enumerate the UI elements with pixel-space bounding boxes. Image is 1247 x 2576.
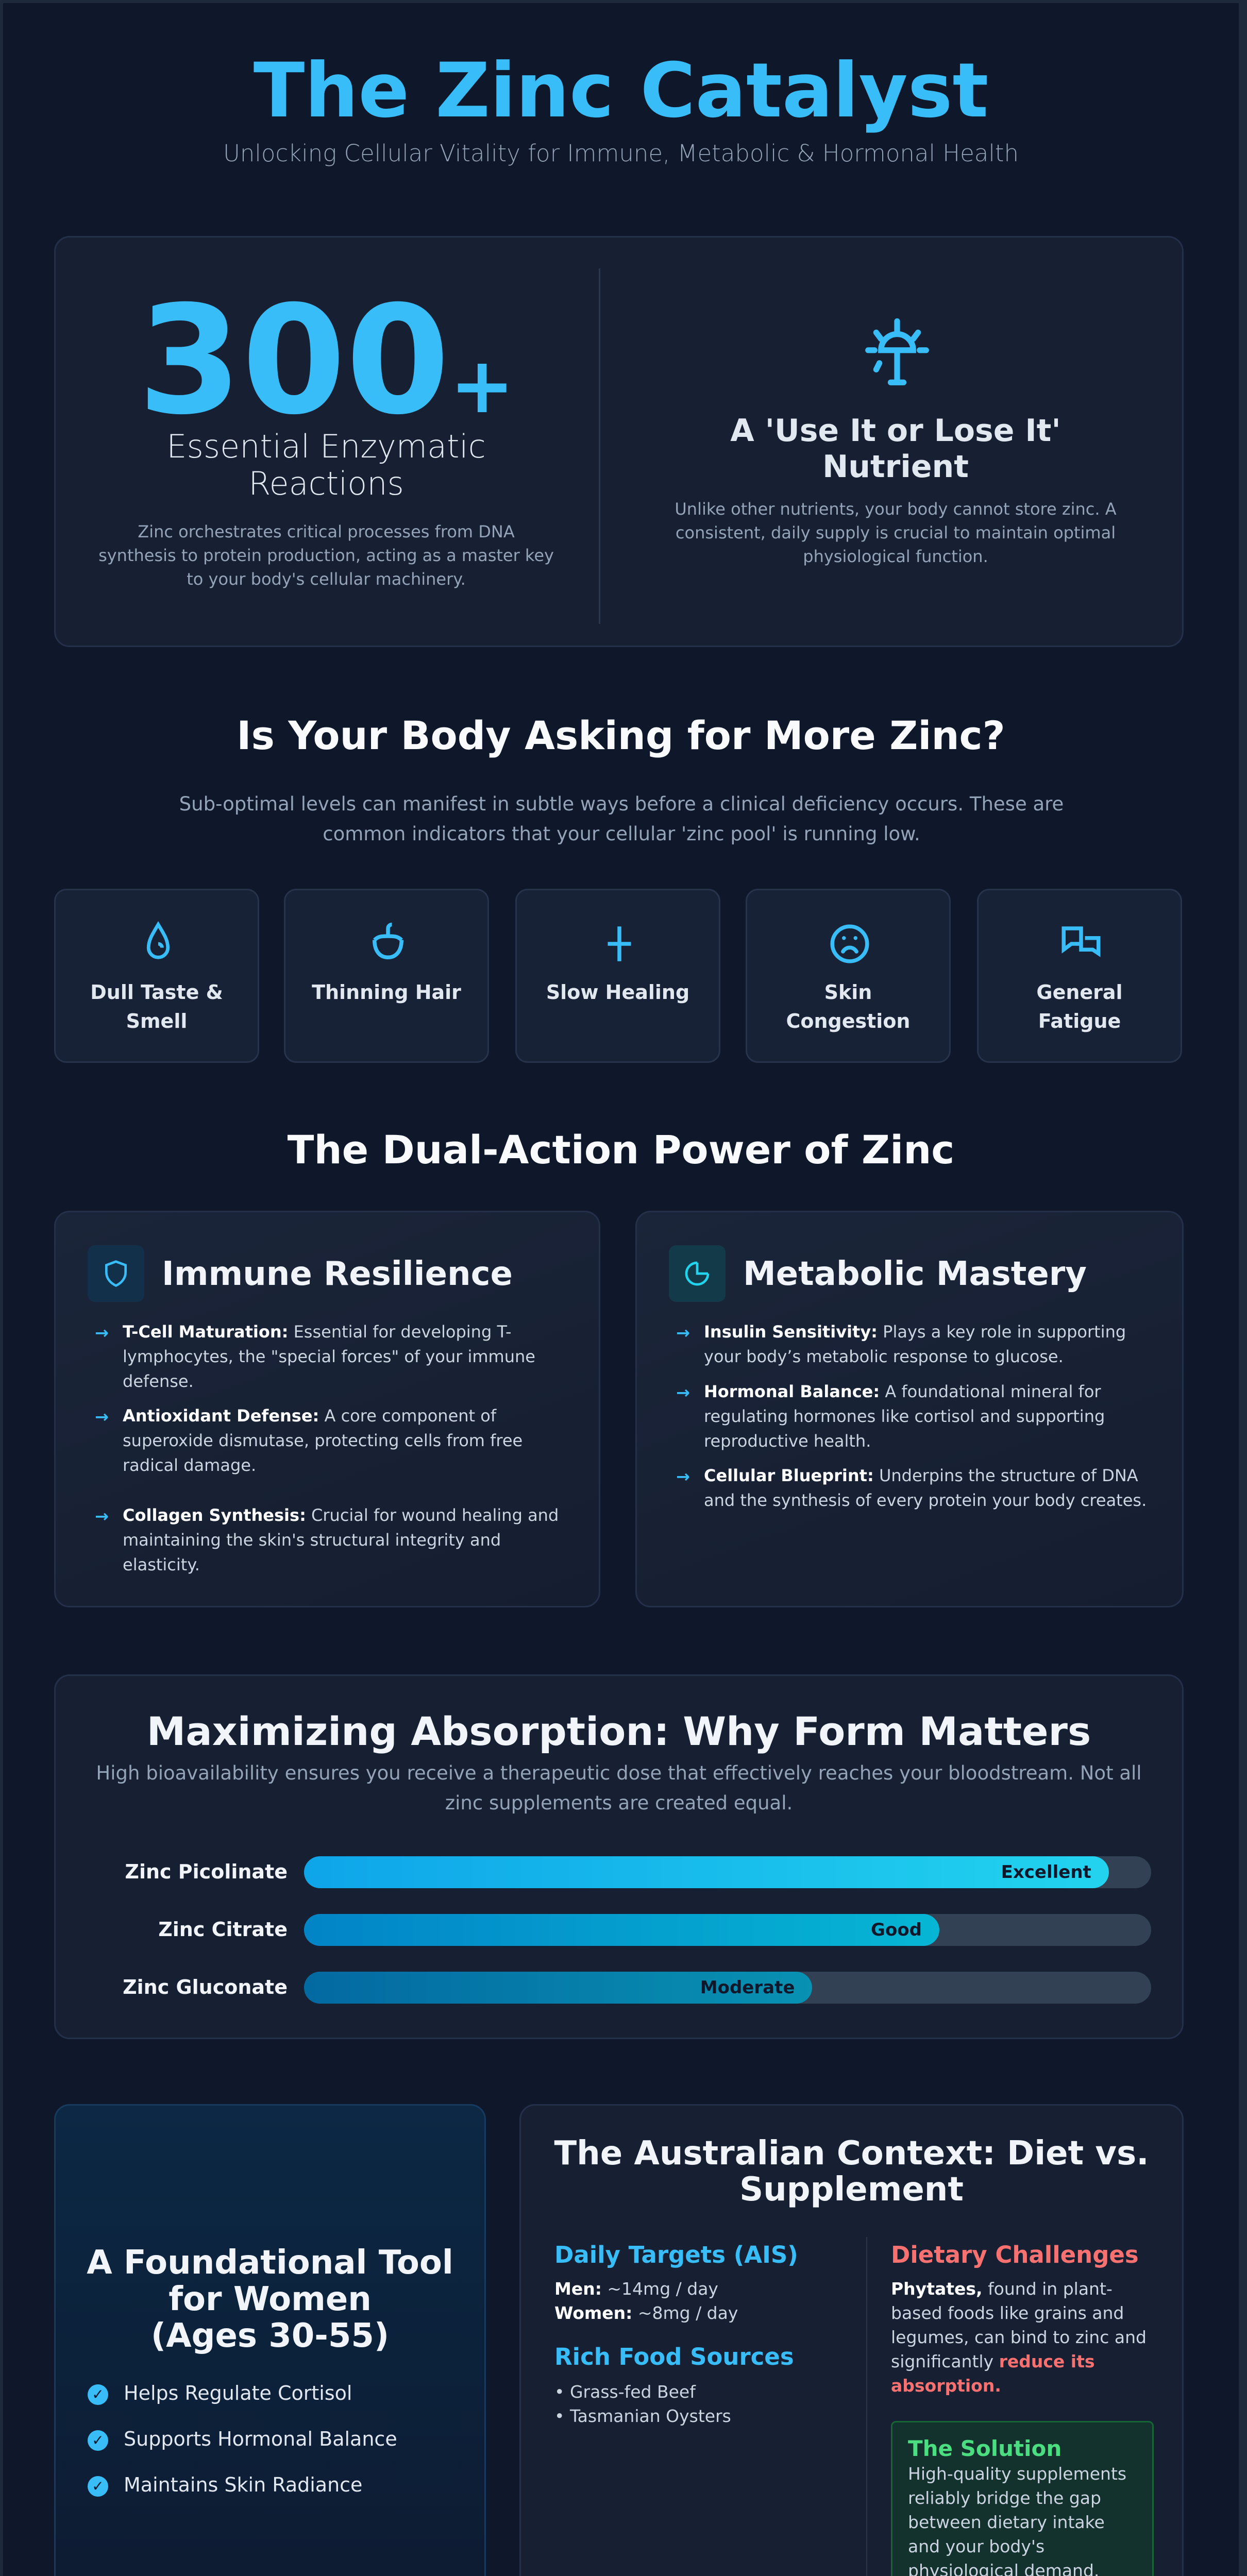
list: immune benefits: → <box>95 1506 109 1526</box>
checklist: women benefits: Supports Hormonal Balance <box>124 2428 397 2450</box>
heading: women: (Ages 30-55) <box>151 2317 389 2355</box>
panel: australian context <box>519 2104 1184 2576</box>
list: metabolic benefits: → <box>676 1383 690 1402</box>
list: metabolic benefits: Hormonal Balance: A foundational mineral for regulating hormones like cortisol and supporting reproductive health. <box>704 1382 1105 1451</box>
panel: symptom slow healing <box>515 889 720 1063</box>
list: immune benefits: → <box>95 1407 109 1427</box>
heading: use it or lose it: A 'Use It or Lose It' Nutrient <box>730 413 1061 485</box>
panel: symptom fatigue: General Fatigue <box>1036 981 1123 1032</box>
bar chart: bioavailability: Zinc Gluconate <box>123 1976 288 1998</box>
heading: zinc deficiency: Is Your Body Asking for More Zinc? <box>237 713 1005 758</box>
panel: symptom thinning hair <box>284 889 489 1063</box>
panel: symptom dull taste <box>54 889 259 1063</box>
checklist: women benefits: ✓ <box>92 2477 104 2495</box>
column: dietary challenges: Dietary Challenges <box>891 2241 1139 2268</box>
list: metabolic benefits <box>676 1322 1147 1510</box>
stat: 300+: 300+ <box>138 274 515 448</box>
list: immune benefits: Collagen Synthesis: Crucial for wound healing and maintaining the skin's structural integrity and elasticity. <box>123 1505 559 1574</box>
panel: women tool <box>54 2104 486 2576</box>
panel: metabolic mastery <box>635 1211 1184 1607</box>
stat label: Essential Enzymatic Reactions <box>166 428 486 502</box>
panel: immune resilience <box>54 1211 600 1607</box>
heading: australian: The Australian Context: Diet vs. Supplement <box>554 2134 1149 2209</box>
bar chart: bioavailability: Excellent <box>1001 1862 1091 1883</box>
list: metabolic benefits: → <box>676 1467 690 1486</box>
callout: the solution <box>891 2421 1154 2576</box>
checklist: women benefits: ✓ <box>92 2385 104 2403</box>
column: daily targets: Women: ~8mg / day <box>554 2303 738 2323</box>
heading: dual action: The Dual-Action Power of Zinc <box>288 1127 954 1173</box>
bar chart: bioavailability: Zinc Citrate <box>158 1918 288 1941</box>
text: absorption intro: High bioavailability ensures you receive a therapeutic dose that effectively reaches your bloodstream. Not all zinc supplements are created equal. <box>96 1762 1142 1814</box>
list: immune benefits: T-Cell Maturation: Essential for developing T-lymphocytes, the "special forces" of your immune defense. <box>123 1322 535 1391</box>
checklist: women benefits <box>88 2382 397 2497</box>
panel: symptom skin congestion <box>746 889 951 1063</box>
text: deficiency intro: Sub-optimal levels can manifest in subtle ways before a clinical deficiency occurs. These are common indicators that your cellular 'zinc pool' is running low. <box>179 793 1064 845</box>
checklist: women benefits: Helps Regulate Cortisol <box>124 2382 352 2404</box>
divider <box>599 268 600 624</box>
list: metabolic benefits: Cellular Blueprint: Underpins the structure of DNA and the synthesis of every protein your body creates. <box>704 1466 1147 1510</box>
bar chart: bioavailability <box>123 1856 1151 2004</box>
panel: symptom slow healing: Slow Healing <box>546 981 689 1004</box>
divider <box>866 2237 867 2576</box>
heading: women: A Foundational Tool for Women <box>87 2244 453 2318</box>
callout: the solution: The Solution <box>908 2436 1061 2461</box>
panel: symptom fatigue <box>977 889 1182 1063</box>
heading: women <box>87 2244 453 2355</box>
bar chart: bioavailability: Good <box>871 1920 922 1940</box>
panel: symptom dull taste: Dull Taste & Smell <box>90 981 223 1032</box>
checklist: women benefits: ✓ <box>92 2432 104 2448</box>
panel: symptom skin congestion: Skin Congestion <box>786 981 910 1032</box>
panel: absorption <box>54 1674 1184 2039</box>
stat description: Zinc orchestrates critical processes from DNA synthesis to protein production, acting as a master key to your body's cellular machinery. <box>98 522 554 589</box>
panel: symptom thinning hair: Thinning Hair <box>312 981 461 1004</box>
checklist: women benefits: Maintains Skin Radiance <box>124 2473 362 2496</box>
column: daily targets: • Grass-fed Beef <box>554 2382 696 2402</box>
icon: lamp <box>865 318 929 385</box>
column: dietary challenges: Phytates, found in plant-based foods like grains and legumes, can bind to zinc and significantly reduce its absorption. <box>891 2279 1147 2396</box>
column: daily targets: Daily Targets (AIS) <box>554 2241 798 2268</box>
panel: australian context: • Tasmanian Oysters <box>554 2406 731 2426</box>
heading: metabolic: Metabolic Mastery <box>743 1255 1087 1293</box>
list: immune benefits: → <box>95 1323 109 1343</box>
panel: key facts <box>54 236 1184 647</box>
bar chart: bioavailability: Zinc Picolinate <box>125 1860 288 1883</box>
icon: clock <box>669 1245 726 1302</box>
heading: absorption: Maximizing Absorption: Why Form Matters <box>147 1708 1091 1754</box>
list: metabolic benefits: Insulin Sensitivity: Plays a key role in supporting your body’s metabolic response to glucose. <box>704 1322 1126 1366</box>
title: The Zinc Catalyst <box>254 47 988 134</box>
list: metabolic benefits: → <box>676 1323 690 1343</box>
bar chart: bioavailability: Moderate <box>700 1977 795 1998</box>
list: immune benefits <box>95 1322 559 1574</box>
icon: shield <box>88 1245 144 1302</box>
subtitle: Unlocking Cellular Vitality for Immune, Metabolic & Hormonal Health <box>223 140 1019 167</box>
column: daily targets: Rich Food Sources <box>554 2343 794 2370</box>
column: daily targets: Men: ~14mg / day <box>554 2279 718 2299</box>
heading: immune: Immune Resilience <box>162 1255 513 1293</box>
column: daily targets <box>554 2241 798 2426</box>
text: use it description: Unlike other nutrients, your body cannot store zinc. A consistent, daily supply is crucial to maintain optimal physiological function. <box>675 499 1117 566</box>
list: immune benefits: Antioxidant Defense: A core component of superoxide dismutase, protecting cells from free radical damage. <box>123 1406 523 1475</box>
